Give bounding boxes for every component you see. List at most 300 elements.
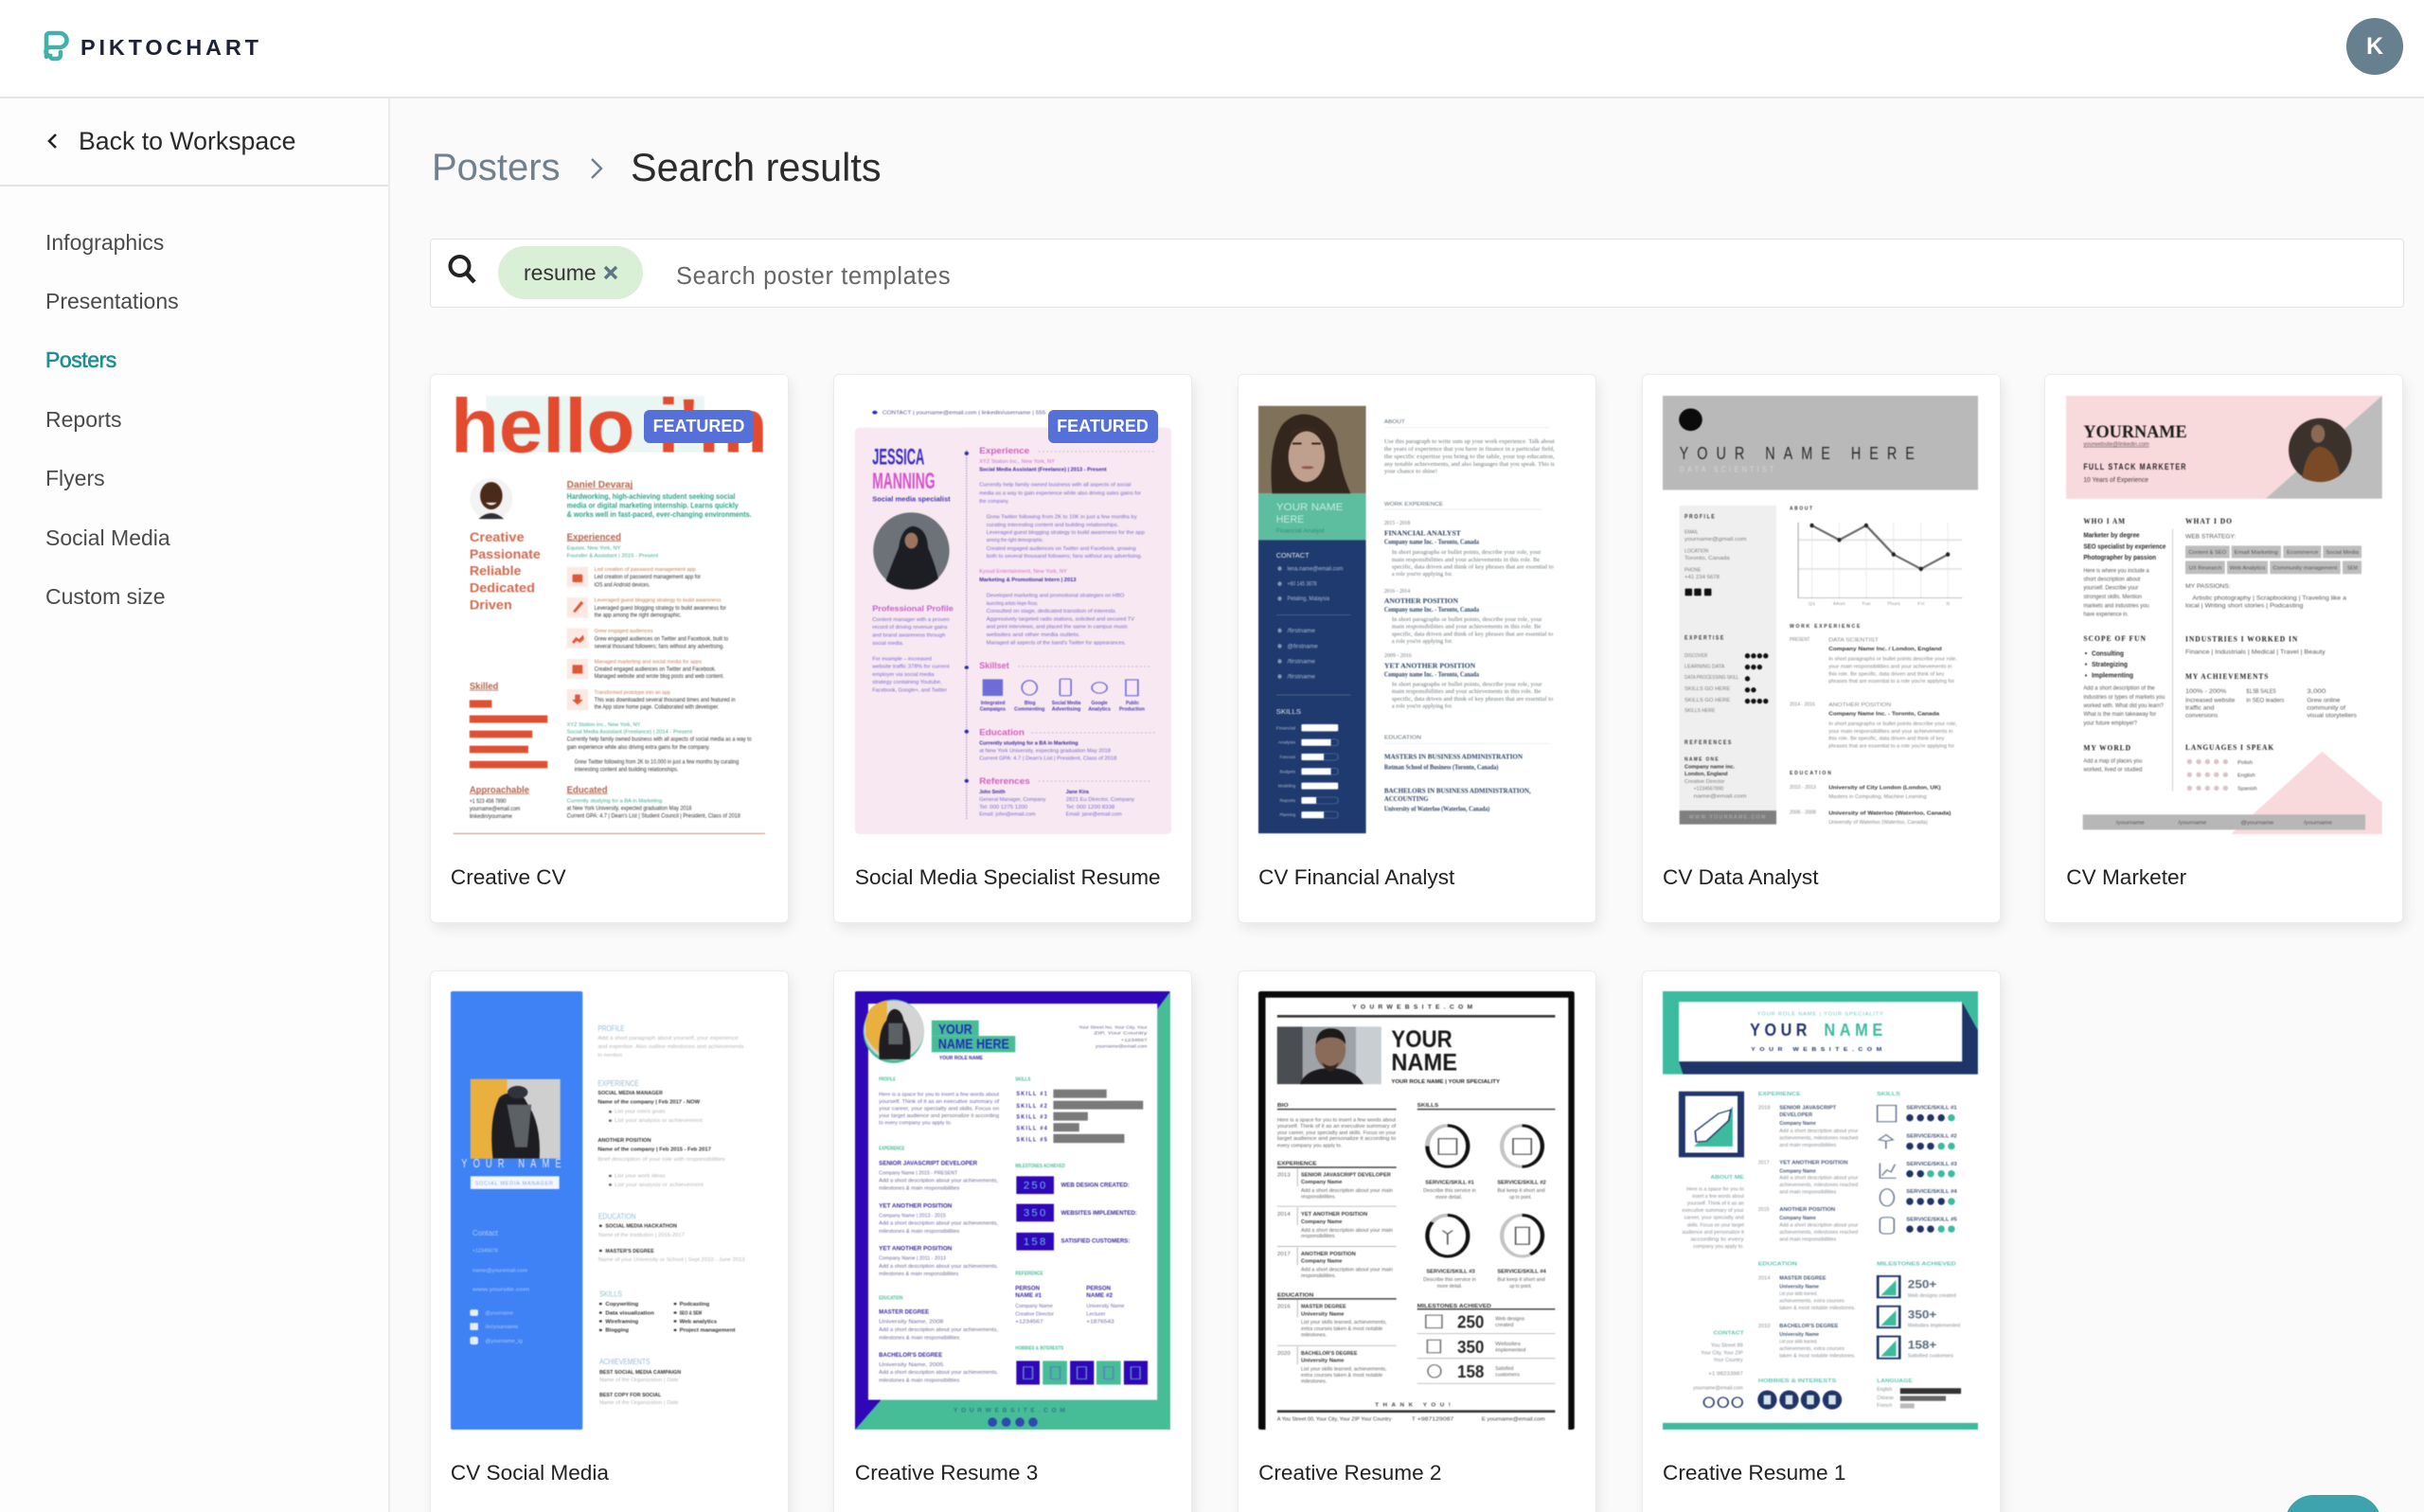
milestone numbers: 250: [1024, 1179, 1047, 1191]
job titles: PERSON: [1086, 1285, 1111, 1292]
pink page background: [855, 428, 1171, 834]
job titles: SKILL #1: [1016, 1091, 1048, 1097]
section headings: EDUCATION: [1384, 736, 1421, 741]
milestone numbers: 158: [1024, 1236, 1047, 1248]
grey body text: Here is a space for you to: [1686, 1187, 1744, 1193]
body copy: Finance | Industrials | Medical | Travel | Beauty: [2185, 649, 2326, 656]
dark body text: iOS and Android devices.: [594, 581, 650, 588]
experience body: launching artists Hope Ross.: [987, 601, 1038, 607]
right rule: [769, 999, 770, 1424]
section headings and rules: MILESTONES ACHIEVED: [1417, 1304, 1491, 1309]
milestone stats: 250+: [1908, 1279, 1937, 1291]
milestone stats: [1878, 1276, 1937, 1359]
skill bars: Forecast: [1280, 756, 1296, 760]
blue side panel: [451, 991, 582, 1430]
grey body text: skills. Focus on your target: [1687, 1223, 1744, 1229]
left bold text: [1301, 1173, 1546, 1364]
breadcrumb parent: Posters: [432, 147, 561, 188]
left bold text: SERVICE/SKILL #2: [1497, 1181, 1546, 1186]
grey body text: List your skills learned,: [1779, 1291, 1818, 1297]
job titles: Rotman School of Business (Toronto, Canada): [1384, 764, 1499, 771]
card: Creative Resume 2: [1239, 971, 1595, 1512]
teal small text: Social Media Assistant (Freelance) | 2014 - Present: [567, 730, 692, 736]
dark purple labels: [979, 468, 1107, 795]
experience body: curating interesting content and building relationships.: [987, 523, 1118, 528]
left bold text: SENIOR JAVASCRIPT DEVELOPER: [1301, 1173, 1391, 1178]
skill bars: Reports: [1280, 799, 1295, 804]
name on teal: YOUR NAME: [1276, 501, 1344, 513]
dark body text: [470, 574, 752, 820]
body copy: your future employer?: [2084, 720, 2137, 727]
sidebar small text: LOCATION: [1684, 549, 1708, 555]
dark labels: Company Name: [1779, 1169, 1816, 1174]
teal headings: PROFILE: [879, 1077, 896, 1082]
language ratings: Polish: [2237, 760, 2253, 766]
section headings and rules: SKILLS: [1417, 1103, 1439, 1109]
job titles: FINANCIAL ANALYST: [1384, 530, 1461, 538]
dark body text: +1 523 456 7890: [470, 798, 506, 805]
sidebar small text: +41 234 5678: [1684, 575, 1720, 580]
milestone rows: 350: [1457, 1337, 1484, 1357]
sidebar headings: Company name inc.: [1684, 765, 1735, 770]
skill icons: [1878, 1106, 1896, 1234]
dark labels: Company Name: [1779, 1121, 1816, 1127]
body copy: Add a short description about your achievements,: [879, 1327, 998, 1333]
grey body text: 2018: [1758, 1106, 1771, 1111]
sidebar: [0, 98, 390, 1512]
header panel: [2066, 396, 2382, 499]
left bold text: SERVICE/SKILL #4: [1497, 1270, 1546, 1275]
dark labels: SERVICE/SKILL #3: [1906, 1162, 1957, 1167]
dark labels: Company Name: [1779, 1216, 1816, 1221]
left body text: 2020: [1277, 1351, 1291, 1357]
name on teal: [1276, 501, 1344, 535]
section headings: Educated: [567, 785, 607, 795]
body copy: Add a short description about your achievements,: [879, 1264, 998, 1270]
grey body text: company you apply to.: [1693, 1244, 1744, 1250]
grey body text: 2010: [1758, 1325, 1771, 1329]
body copy: [1384, 438, 1556, 709]
line chart: Q1: [1809, 602, 1816, 607]
sidebar small text: LEARNING DATA: [1684, 665, 1725, 669]
milestone rows: 158: [1457, 1361, 1485, 1381]
sidebar small text: [1684, 530, 1746, 800]
body copy: local | Writing short stories | Podcasting: [2185, 603, 2304, 610]
profile text: Professional Profile: [872, 605, 954, 614]
grey body text: French: [1877, 1403, 1893, 1409]
bold lines: Photographer by passion: [2084, 555, 2156, 561]
sidebar small text: DISCOVER: [1684, 653, 1707, 659]
grey body text: +1 98233987: [1708, 1372, 1743, 1378]
dark labels: YET ANOTHER POSITION: [1779, 1161, 1848, 1165]
skill bars: Modeling: [1278, 785, 1295, 790]
line chart: Thurs: [1887, 602, 1900, 607]
left bold text: Company Name: [1301, 1219, 1343, 1225]
experience body: at New York University, expecting graduation May 2018: [979, 749, 1111, 754]
footer: [1277, 1403, 1555, 1422]
grey body text: 2017: [1758, 1161, 1770, 1165]
body copy: 3,000: [2308, 689, 2326, 696]
teal headings: HOBBIES & INTERESTS: [1015, 1346, 1064, 1351]
dark body: MASTER'S DEGREE: [605, 1249, 654, 1254]
dark body: BEST SOCIAL MEDIA CAMPAIGN: [599, 1370, 681, 1376]
poster thumbnail: CV Marketer: [2066, 396, 2382, 835]
job titles: Company name Inc. - Toronto, Canada: [1384, 671, 1480, 678]
milestone stats: 350+: [1908, 1309, 1937, 1322]
line chart: [1790, 507, 1962, 607]
dark labels: SERVICE/SKILL #4: [1906, 1189, 1957, 1195]
dark body: Copywriting: [605, 1302, 638, 1307]
blue side panel: www.yoursite.com: [472, 1288, 529, 1292]
sidebar small text: yourname@gmail.com: [1684, 537, 1746, 543]
left body text: extra courses taken & most notable: [1301, 1374, 1383, 1379]
grey body text: Add a short description about your: [1779, 1176, 1859, 1182]
sidebar headings: REFERENCES: [1684, 739, 1733, 746]
body copy: milestones & main responsibilities: [879, 1186, 960, 1192]
header banner: [1663, 991, 1978, 1075]
section headings: [1384, 419, 1550, 744]
grey body text: career, your specialty and: [1684, 1216, 1744, 1221]
sidebar small text: SKILLS GO HERE: [1684, 698, 1731, 703]
right column headings: [1790, 624, 1951, 816]
blue side panel: /in/yourname: [485, 1325, 518, 1330]
language ratings: English: [2237, 774, 2255, 779]
grey body text: taken & most notable milestones.: [1779, 1354, 1856, 1359]
left body text: implemented: [1495, 1348, 1526, 1353]
section headings: [597, 1025, 651, 1367]
job titles: ACCOUNTING: [1384, 795, 1429, 803]
skill tags: UX Research: [2189, 566, 2222, 572]
nav item: Custom size: [45, 584, 166, 609]
contact and skills text: /firstname: [1288, 673, 1315, 680]
contact and skills text: lena.name@email.com: [1288, 565, 1344, 572]
teal small text: Equisix, New York, NY: [567, 546, 621, 552]
grey body text: achievements, milestones reached: [1779, 1136, 1859, 1141]
footer: E yourname@email.com: [1482, 1417, 1545, 1422]
grey body text: yourself. Think of it as an: [1687, 1201, 1744, 1207]
grey body text: Your Country: [1714, 1358, 1743, 1363]
left body text: [1277, 1118, 1545, 1385]
body copy: Increased website: [2185, 698, 2236, 704]
nav item: Social Media: [45, 525, 170, 549]
section headings: Experienced: [567, 532, 621, 543]
skill bars: Analysis: [1278, 741, 1295, 746]
left body text: extra courses taken & most notable: [1301, 1326, 1383, 1332]
left body text: up to point.: [1509, 1284, 1532, 1290]
section headings: Experience: [979, 446, 1030, 456]
grey body text: and main responsibilities: [1779, 1237, 1836, 1243]
name on teal: HERE: [1276, 513, 1304, 525]
sidebar: WWW.YOURNAME.COM: [1689, 815, 1767, 820]
dark labels: ANOTHER POSITION: [1779, 1207, 1835, 1213]
grey body text: Satisfied customers: [1908, 1354, 1953, 1360]
left bold text: MASTER DEGREE: [1301, 1305, 1346, 1310]
poster thumbnail: Creative Resume 1: [1662, 990, 1979, 1431]
left body text: 2014: [1277, 1212, 1291, 1218]
milestone rows: 250: [1457, 1312, 1484, 1332]
grey body text: executive summary of your: [1682, 1209, 1744, 1214]
grey body text: 2015: [1758, 1207, 1770, 1213]
teal headings: HOBBIES & INTERESTS: [1758, 1379, 1837, 1384]
breadcrumb current: Search results: [631, 146, 882, 189]
grey body text: insert a few words about: [1692, 1195, 1744, 1200]
section headings: Approachable: [470, 785, 529, 795]
body copy: in SEO leaders: [2247, 698, 2285, 704]
contact lines: +1234567: [1121, 1039, 1148, 1043]
tag label: resume: [524, 260, 597, 285]
line chart: Mon: [1833, 602, 1845, 607]
job titles: Company name Inc. - Toronto, Canada: [1384, 607, 1480, 614]
back label: Back to Workspace: [79, 127, 295, 155]
job titles: NAME #1: [1015, 1292, 1042, 1299]
body copy: visual storytellers: [2308, 713, 2357, 720]
left body text: But keep it short and: [1497, 1189, 1545, 1194]
section headings and rules: EDUCATION: [1277, 1293, 1314, 1299]
dark labels: MASTER DEGREE: [1779, 1276, 1827, 1282]
skill bars: [470, 701, 547, 769]
teal headings: SKILLS: [1015, 1077, 1031, 1083]
line chart: ABOUT: [1790, 507, 1814, 511]
body copy: Add a short description of the: [2084, 686, 2155, 692]
contact lines: Your Street No. Your City, Your: [1078, 1026, 1147, 1031]
poster thumbnail: CV Financial Analyst: [1257, 405, 1556, 835]
footer: A You Street 00, Your City, Your ZIP Your Country: [1277, 1417, 1392, 1422]
grey body text: achievements, milestones reached: [1779, 1230, 1859, 1236]
poster thumbnail: CV Social Media: [450, 990, 745, 1431]
skill tags: Web Analytics: [2230, 566, 2266, 572]
pink subheads: Kyoud Entertainment, New York, NY: [979, 569, 1067, 575]
left body text: milestones.: [1301, 1333, 1328, 1339]
dark body: ANOTHER POSITION: [597, 1138, 651, 1144]
grey body text: audience and personalize it: [1682, 1230, 1744, 1236]
sidebar: [1680, 506, 1776, 825]
body copy: Add a map of places you: [2084, 759, 2143, 765]
job titles: University of Waterloo (Waterloo, Canada): [1384, 806, 1490, 812]
skill bars: [1276, 724, 1338, 818]
right column body: University of Waterloo (Waterloo, Canada): [1828, 820, 1928, 826]
experience body: Email: john@email.com: [979, 812, 1036, 817]
body copy: have experience in.: [2084, 613, 2130, 618]
body copy: a role you're applying for.: [1392, 703, 1453, 709]
grey body: List your analysis or achievement: [615, 1118, 703, 1124]
sidebar small text: name@email.com: [1694, 794, 1746, 800]
skill tags: Email Marketing: [2235, 550, 2278, 557]
skill labels: Google: [1091, 701, 1108, 706]
job titles: PERSON: [1015, 1285, 1040, 1292]
section headings: SKILLS: [599, 1290, 622, 1299]
grey body text: English: [1877, 1388, 1893, 1393]
language bars: [1900, 1389, 1961, 1409]
name block: YOUR ROLE NAME: [939, 1056, 983, 1061]
job titles: WEBSITES IMPLEMENTED:: [1060, 1210, 1137, 1217]
icon: tag remove: [604, 265, 617, 280]
job titles: MASTER DEGREE: [879, 1308, 929, 1316]
job titles: NAME #2: [1086, 1292, 1113, 1299]
header panel: YOURNAME: [2084, 421, 2187, 442]
body copy: Creative Director: [1015, 1312, 1054, 1317]
teal headings: EXPERIENCE: [879, 1147, 905, 1152]
grey body text: and main responsibilities: [1779, 1190, 1836, 1196]
hobby circles and social icons: [1703, 1391, 1842, 1410]
top strip: YOURWEBSITE.COM: [1352, 1004, 1476, 1011]
section headings: Education: [979, 728, 1025, 738]
job titles: SKILL #5: [1016, 1136, 1048, 1143]
grey body text: achievements, milestones reached: [1779, 1183, 1859, 1188]
grey body: [597, 1036, 745, 1406]
contact lines: [1078, 1026, 1148, 1050]
dark body: Name of the company | Feb 2017 - NOW: [597, 1100, 700, 1106]
left body text: Websites: [1495, 1342, 1521, 1347]
grey body text: Add a short description about your: [1779, 1129, 1859, 1134]
card: CV Social Media: [430, 971, 788, 1512]
name block: YOUR: [938, 1022, 972, 1038]
left body text: Add a short description about your main: [1301, 1189, 1393, 1194]
body copy: University Name: [1086, 1305, 1124, 1309]
social footer band: /yourname: [2179, 820, 2207, 827]
grey body: Name of the Institution | 2016-2017: [598, 1233, 685, 1238]
body copy: traffic and: [2185, 705, 2215, 712]
sidebar headings: NAME ONE: [1684, 757, 1720, 762]
left body text: List your skills learned, achievements,: [1301, 1320, 1387, 1325]
dark labels: DEVELOPER: [1779, 1112, 1812, 1118]
milestone rows: [1426, 1312, 1485, 1381]
left body text: more detail.: [1435, 1195, 1463, 1201]
body copy: Lecturer: [1086, 1312, 1106, 1317]
name block: JESSICA: [872, 445, 924, 471]
dark body: Blogging: [605, 1328, 629, 1334]
skill rating dots: [1906, 1114, 1955, 1233]
left body text: responsibilities.: [1301, 1234, 1336, 1239]
body copy: your target audience and personalize it according: [879, 1113, 999, 1119]
contact lines: ZIP, Your Country: [1094, 1032, 1147, 1037]
skill bars: Planning: [1280, 813, 1295, 818]
left body text: every company you apply to.: [1277, 1144, 1343, 1148]
grey body text: [1682, 1106, 1960, 1409]
contact and skills text: @firstname: [1288, 643, 1318, 649]
left body text: 2017: [1277, 1252, 1291, 1257]
portrait: [470, 478, 512, 521]
nav item: Flyers: [45, 466, 105, 490]
portrait: [873, 513, 950, 590]
left bold text: ANOTHER POSITION: [1301, 1252, 1356, 1257]
bold lines: Implementing: [2092, 673, 2133, 680]
sidebar small text: Creative Director: [1684, 779, 1725, 785]
profile text: employer via social media: [872, 672, 935, 678]
right column headings: WORK EXPERIENCE: [1790, 624, 1862, 630]
left bold text: SERVICE/SKILL #1: [1425, 1181, 1474, 1186]
dark labels: BACHELOR'S DEGREE: [1779, 1325, 1839, 1329]
chat help button: [2285, 1495, 2381, 1512]
dark body: Data visualization: [605, 1311, 654, 1316]
poster thumbnail: Creative Resume 2: [1257, 990, 1576, 1431]
poster thumbnail: CV Data Analyst: [1663, 396, 1979, 826]
name: YOUR: [1391, 1026, 1453, 1053]
card title: CV Data Analyst: [1663, 865, 1819, 889]
body copy: University Name, 2005: [879, 1362, 943, 1368]
experience body: Tel: 000 1275 1200: [979, 805, 1027, 810]
social footer band: @yourname: [2241, 820, 2274, 827]
bold lines: Strategizing: [2092, 662, 2128, 668]
left body text: up to point.: [1509, 1195, 1532, 1201]
dark labels: SERVICE/SKILL #2: [1906, 1134, 1957, 1140]
orange subheads: Managed marketing and social media for apps: [594, 660, 702, 665]
body copy: Artistic photography | Scrapbooking | Traveling like a: [2193, 596, 2347, 602]
blue side panel: +12345678: [472, 1249, 498, 1254]
job titles: Company name Inc. - Toronto, Canada: [1384, 539, 1480, 545]
right column body: Masters in Computing, Machine Learning: [1828, 794, 1927, 800]
icon: back chevron: [47, 133, 57, 149]
job titles: [1384, 530, 1531, 812]
grey body: List your analysis or achievement: [615, 1183, 704, 1188]
sidebar column: [1258, 406, 1366, 834]
portrait: [863, 1000, 924, 1063]
left body text: responsibilities.: [1301, 1273, 1336, 1279]
left body text: Describe this service in: [1423, 1278, 1476, 1283]
job titles: ANOTHER POSITION: [1384, 597, 1458, 605]
divider: [2172, 529, 2173, 792]
body copy: short description about: [2084, 578, 2141, 583]
job titles: YET ANOTHER POSITION: [1384, 663, 1475, 669]
body copy: conversions: [2185, 713, 2219, 720]
adjectives list: Driven: [470, 597, 512, 613]
icon: breadcrumb chevron: [591, 158, 603, 179]
left bold text: YET ANOTHER POSITION: [1301, 1212, 1368, 1218]
search bar: [430, 239, 2404, 308]
contact and skills text: SKILLS: [1276, 708, 1301, 716]
dark labels: University Name: [1779, 1285, 1819, 1290]
adjectives list: Dedicated: [470, 580, 535, 596]
left body text: Web designs: [1495, 1317, 1524, 1323]
dark body: SOCIAL MEDIA HACKATHON: [605, 1224, 677, 1230]
icon: magnifier: [449, 255, 476, 284]
teal headings: ABOUT ME: [1710, 1175, 1744, 1181]
left body text: Here is a space for you to insert a few words about: [1277, 1118, 1396, 1123]
dark body text: yourname@email.com: [470, 806, 520, 812]
adjectives list: Passionate: [470, 547, 541, 561]
sidebar small text: +1234567890: [1694, 787, 1724, 792]
line chart: S: [1946, 602, 1950, 607]
dark purple labels: Marketing & Promotional Intern | 2013: [979, 578, 1076, 583]
contact row: CONTACT | yourname@email.com | linkedin/username | 555: [882, 411, 1045, 416]
skill labels: Campaigns: [980, 707, 1006, 712]
logo wordmark: PIKTOCHART: [80, 35, 259, 60]
social footer band: /yourname: [2304, 820, 2332, 827]
teal small text: Currently studying for a BA in Marketing: [567, 799, 662, 805]
body copy: Here is a space for you to insert a few words about: [879, 1093, 999, 1097]
teal headings: EXPERIENCE: [1758, 1092, 1801, 1097]
body copy: What is the main takeaway for: [2084, 712, 2156, 719]
frame: [855, 991, 1170, 1430]
contact lines: yourname@email.com: [1096, 1045, 1147, 1050]
skill bars: [1053, 1090, 1143, 1144]
social footer band: [2083, 815, 2365, 830]
left body text: milestones.: [1301, 1379, 1328, 1385]
job titles: YET ANOTHER POSITION: [879, 1245, 952, 1253]
contact and skills text: [1276, 552, 1351, 716]
social footer band: /yourname: [2116, 820, 2145, 827]
section headings: LANGUAGES I SPEAK: [2185, 743, 2274, 753]
portrait: [1277, 1027, 1381, 1084]
header banner: YOUR WEBSITE.COM: [1751, 1047, 1886, 1053]
body copy: worked with. What did you learn?: [2083, 703, 2164, 710]
section headings: EDUCATION: [598, 1213, 635, 1221]
body copy: your career, your specialty and skills. Focus on: [879, 1107, 999, 1112]
body copy: strongest skills. Mention: [2084, 595, 2142, 600]
contact and skills text: /firstname: [1288, 658, 1315, 665]
right column body: [1790, 637, 1957, 826]
left body text: more detail.: [1437, 1284, 1463, 1290]
website footer: [954, 1407, 1068, 1427]
